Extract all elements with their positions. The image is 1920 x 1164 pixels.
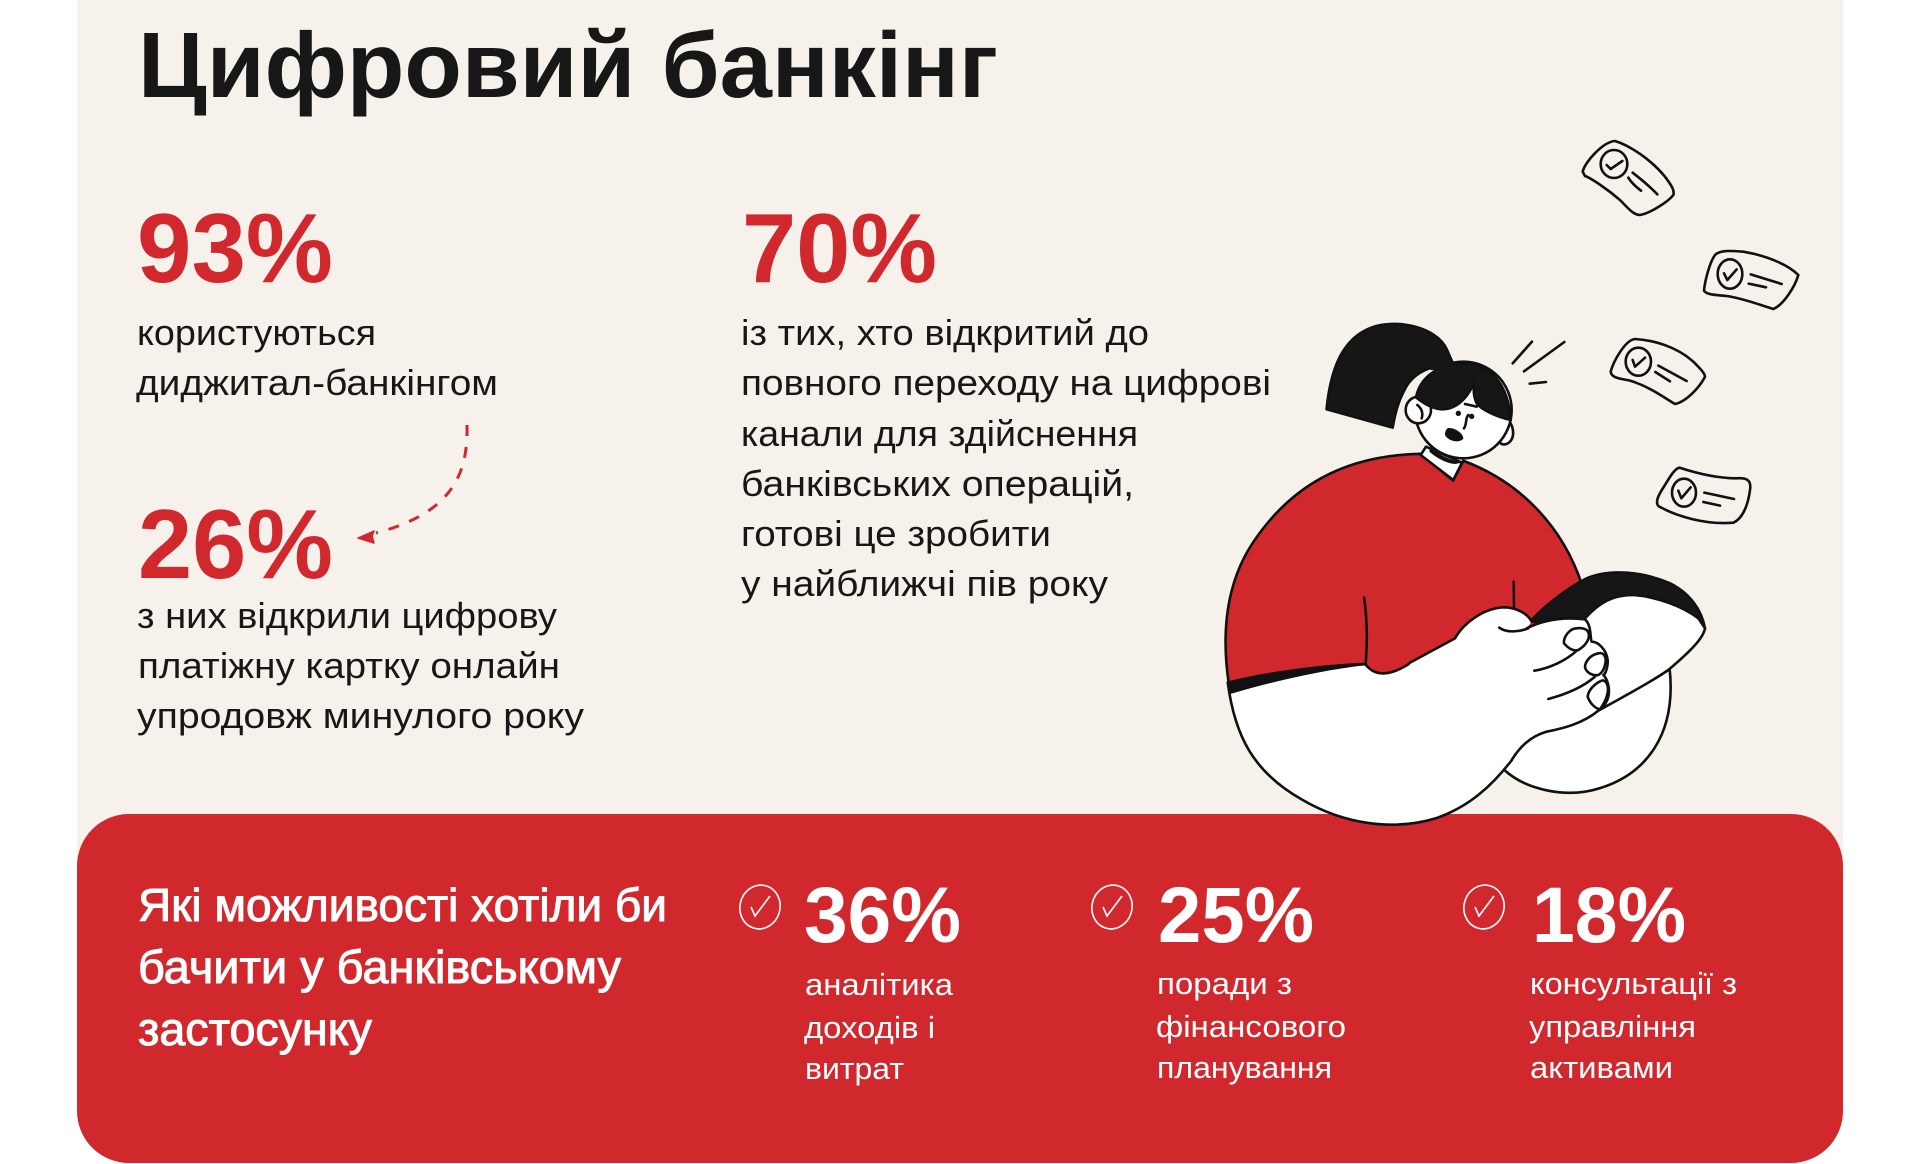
torso lower white xyxy=(1228,625,1512,825)
waistband xyxy=(1229,663,1365,694)
stat: 70%: готові це зробити xyxy=(741,513,1051,554)
stat: 36%: витрат xyxy=(805,1051,904,1086)
heading: wished features xyxy=(138,879,667,1055)
stat: 36%: 36% xyxy=(804,870,961,959)
stat: 26%: 26% xyxy=(138,489,333,599)
stat: 70%: банківських операцій, xyxy=(741,463,1134,504)
icon: check circle xyxy=(735,881,785,933)
sleeve line xyxy=(1364,598,1367,663)
payment cards xyxy=(1583,141,1798,523)
stat: 93%: користуються xyxy=(137,312,376,353)
stat: 93%: диджитал-банкінгом xyxy=(136,362,498,403)
illustration: woman with phone xyxy=(1226,141,1798,825)
stat: 70%: 70% xyxy=(742,193,937,303)
stat: 25%: поради з xyxy=(1157,966,1292,1001)
stat: 25% xyxy=(1087,870,1346,1085)
stat: 93% xyxy=(136,193,498,403)
stat: 18%: консультації з xyxy=(1530,966,1737,1001)
icon: check circle xyxy=(1459,881,1509,933)
heading: wished features: застосунку xyxy=(138,1003,372,1055)
stat: 26%: з них відкрили цифрову xyxy=(137,595,557,636)
stat: 70% xyxy=(741,193,1271,604)
title: Цифровий банкінг xyxy=(138,13,998,117)
red shirt xyxy=(1226,454,1592,683)
stat: 36% xyxy=(735,870,961,1086)
stat: 25%: планування xyxy=(1157,1050,1332,1085)
stat: 70%: канали для здійснення xyxy=(741,413,1138,454)
stat: 70%: у найближчі пів року xyxy=(741,563,1108,604)
heading: wished features: бачити у банківському xyxy=(138,941,621,993)
stat: 25%: 25% xyxy=(1158,870,1314,959)
stat: 25%: фінансового xyxy=(1156,1009,1346,1044)
panel: cream background xyxy=(77,0,1843,960)
panel: red options band xyxy=(77,814,1843,1163)
stat: 93%: 93% xyxy=(137,193,333,303)
stat: 70%: із тих, хто відкритий до xyxy=(741,312,1149,353)
head xyxy=(1406,342,1564,480)
stat: 26%: упродовж минулого року xyxy=(137,695,584,736)
heading: wished features: Які можливості хотіли би xyxy=(138,879,667,931)
stat: 26% xyxy=(137,489,584,736)
stat: 36%: доходів і xyxy=(804,1010,935,1045)
stat: 18%: управління xyxy=(1529,1009,1696,1044)
phone and hand xyxy=(1410,572,1705,760)
stat: 36%: аналітика xyxy=(805,967,954,1002)
belly xyxy=(1504,666,1671,793)
stat: 18% xyxy=(1459,870,1737,1085)
ponytail xyxy=(1327,324,1454,428)
stat: 70%: повного переходу на цифрові xyxy=(741,362,1271,403)
icon: check circle xyxy=(1087,881,1137,933)
stat: 18%: 18% xyxy=(1532,870,1686,959)
stat: 26%: платіжну картку онлайн xyxy=(138,645,560,686)
stat: 18%: активами xyxy=(1530,1050,1673,1085)
arrow: dashed from 93% to 26% xyxy=(358,425,467,543)
